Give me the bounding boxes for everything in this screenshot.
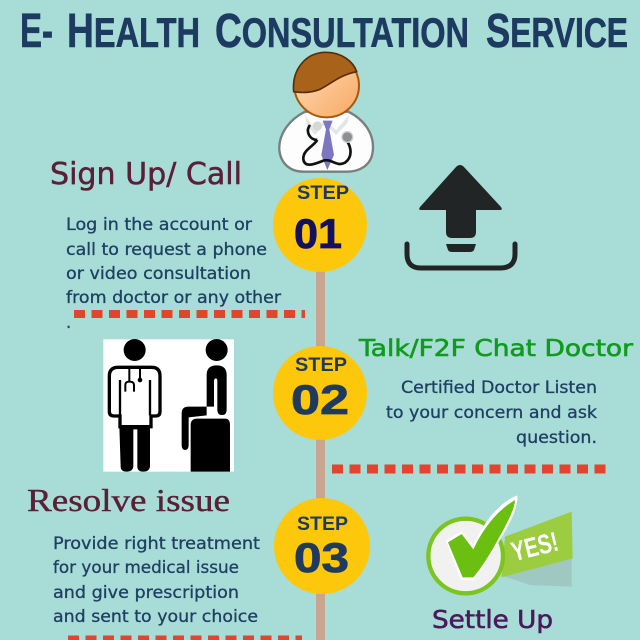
- text block: step 3: for your medical issue: [53, 558, 239, 577]
- label: settle up: Settle Up: [432, 605, 553, 634]
- text block: step 1: [66, 215, 281, 332]
- icon: doctor and patient: [103, 339, 234, 472]
- text block: step 3: Provide right treatment: [53, 534, 261, 553]
- title: CONSULTATION: [215, 5, 469, 58]
- text block: step 3: and sent to your choice: [53, 607, 258, 626]
- heading: talk to doctor: Talk/F2F Chat Doctor: [358, 336, 634, 362]
- step 03 badge: [274, 498, 370, 594]
- text block: step 2: question.: [516, 428, 597, 447]
- step 01 badge: 01: [294, 210, 342, 257]
- heading: sign up: Sign Up/ Call: [50, 157, 242, 192]
- text block: step 1: Log in the account or: [66, 215, 252, 234]
- timeline line: [316, 265, 325, 640]
- step 02 badge: 02: [291, 376, 349, 423]
- step 03 badge: 03: [294, 534, 349, 581]
- text block: step 1: from doctor or any other: [66, 288, 281, 307]
- step 01 badge: [273, 178, 367, 272]
- text block: step 3: and give prescription: [53, 583, 239, 602]
- step 01 badge: STEP: [297, 183, 349, 204]
- icon: doctor avatar: [279, 52, 373, 172]
- divider: step 2: [332, 464, 612, 474]
- text block: step 2: to your concern and ask: [386, 403, 597, 422]
- text block: step 1: call to request a phone: [66, 240, 267, 259]
- text block: step 1: .: [66, 313, 71, 332]
- heading: resolve issue: Resolve issue: [27, 482, 230, 518]
- step 02 badge: STEP: [295, 355, 347, 376]
- icon: yes checkmark: YES!: [508, 526, 561, 567]
- step 02 badge: [273, 346, 367, 440]
- icon: upload: [407, 165, 515, 268]
- text block: step 3: [53, 534, 261, 626]
- step 03 badge: STEP: [297, 514, 348, 535]
- icon: yes checkmark: [428, 495, 573, 593]
- text block: step 2: Certified Doctor Listen: [401, 378, 597, 397]
- text block: step 1: or video consultation: [66, 264, 251, 283]
- title: HEALTH: [67, 5, 200, 58]
- divider: step 1: [74, 310, 305, 318]
- title: E-: [20, 5, 53, 58]
- title: [20, 5, 628, 58]
- divider: step 3: [68, 636, 302, 640]
- text block: step 2: [386, 378, 597, 447]
